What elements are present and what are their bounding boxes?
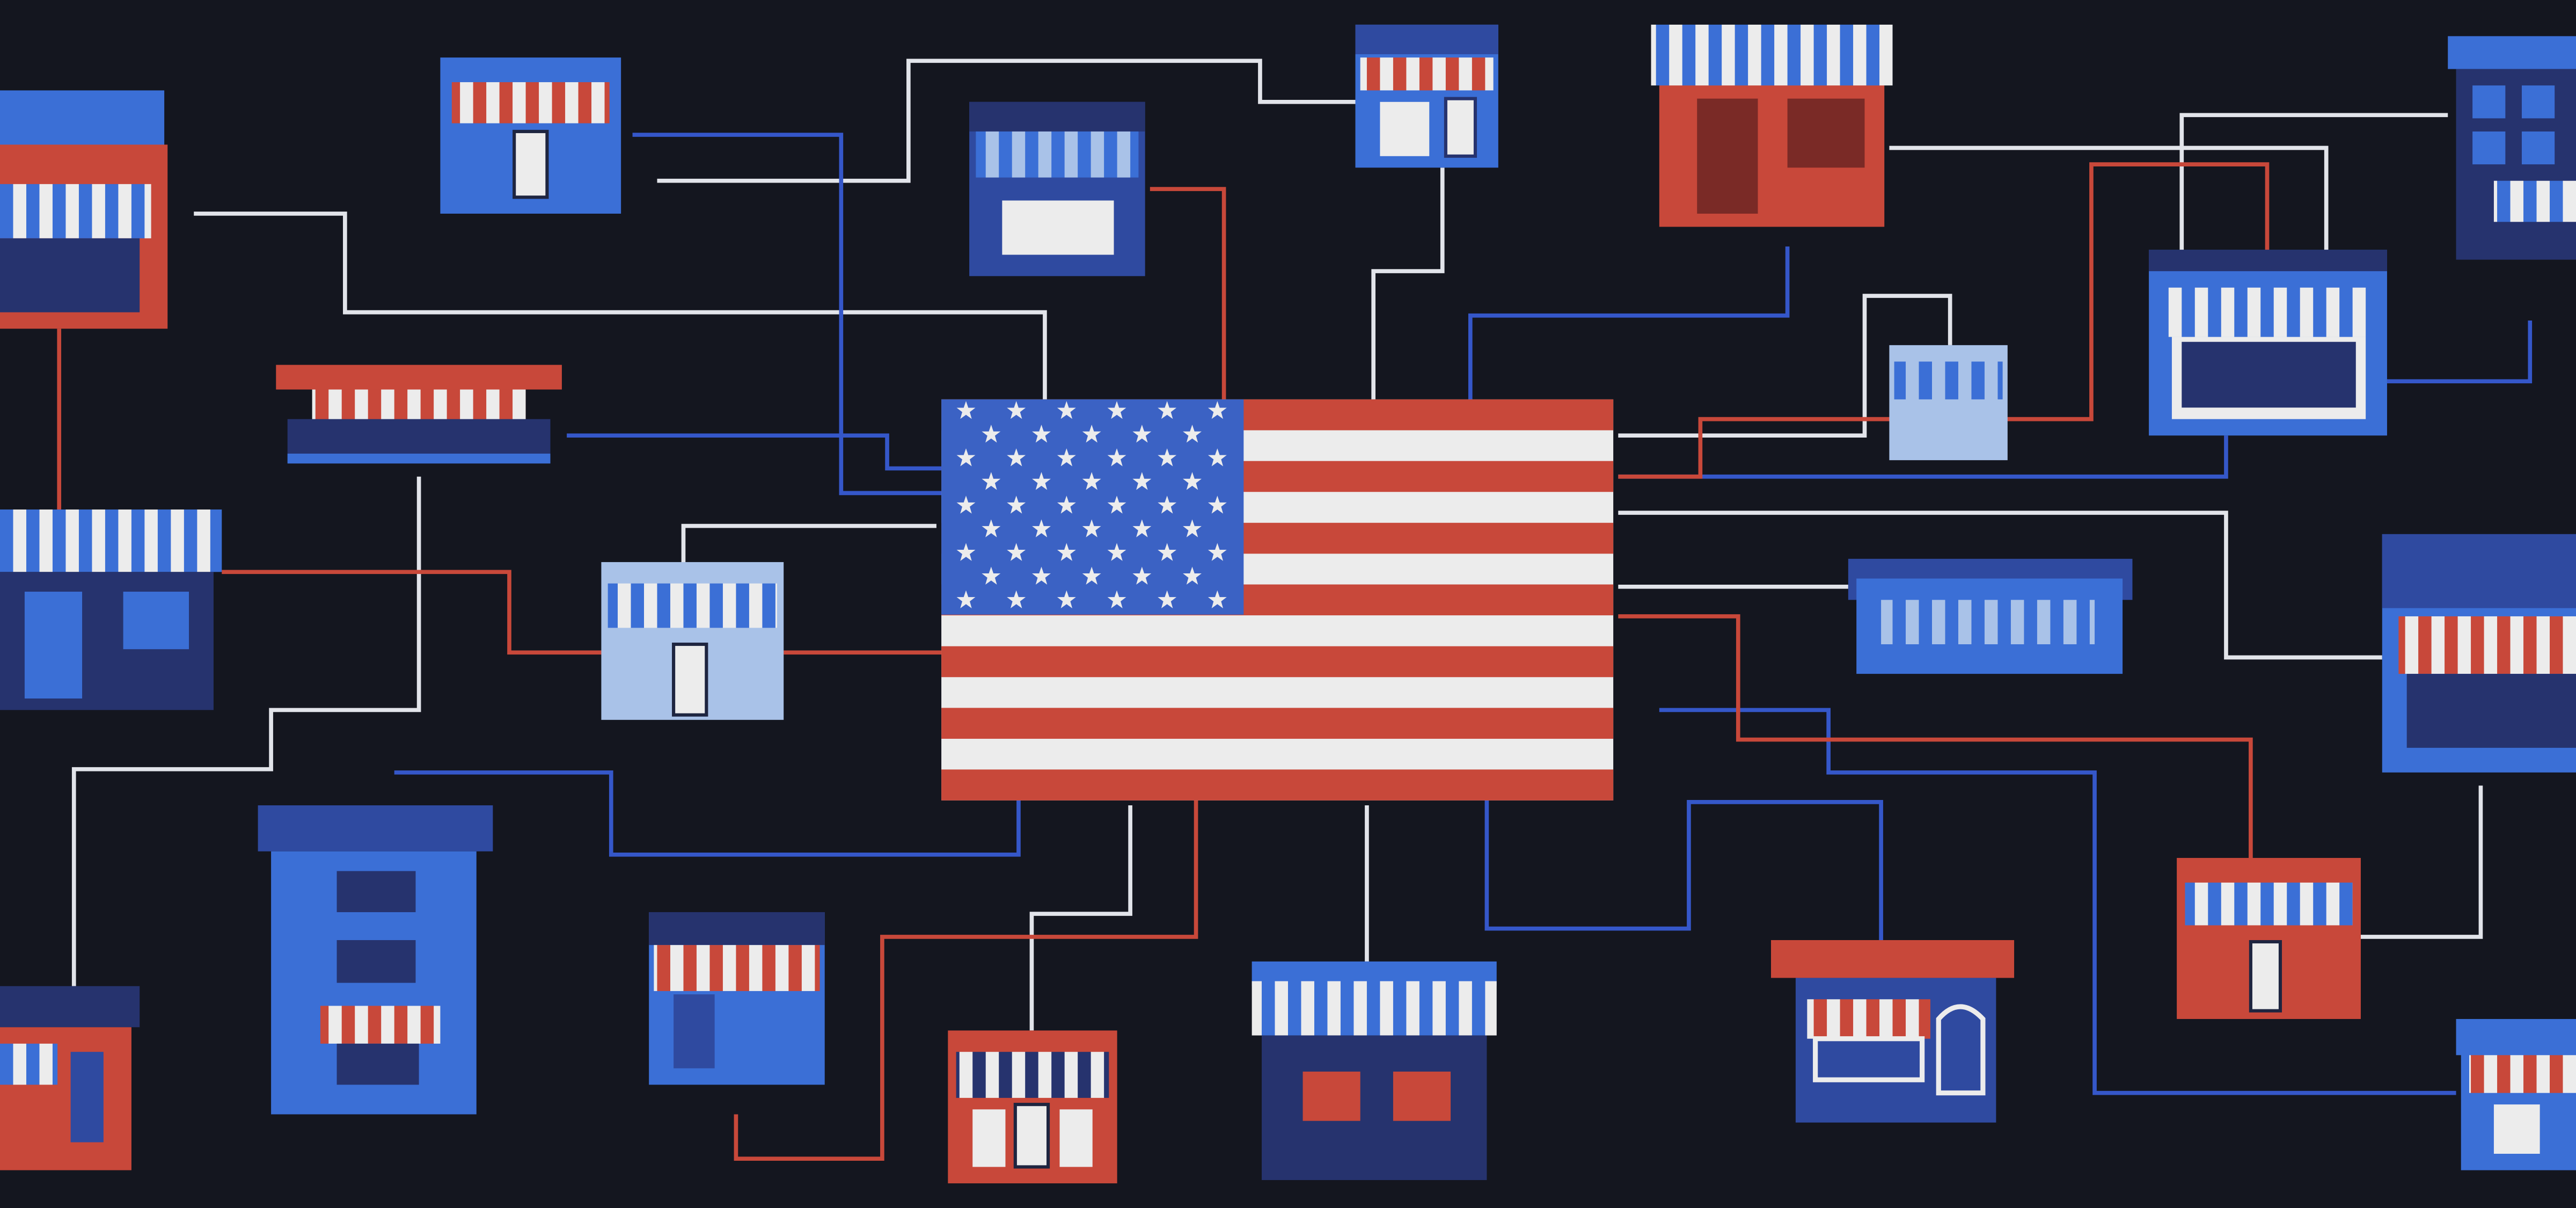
store 6 bbox=[2448, 36, 2576, 260]
store 14 bbox=[258, 805, 493, 1115]
store 3 bbox=[969, 102, 1145, 276]
store 7 bbox=[2149, 250, 2387, 435]
flag canton with stars bbox=[941, 399, 1243, 615]
store 16 bbox=[948, 1030, 1117, 1183]
store 20 bbox=[2456, 1019, 2576, 1170]
store 9 bbox=[276, 365, 562, 463]
store 13 bbox=[2382, 534, 2576, 773]
store 8 bbox=[1889, 345, 2008, 460]
store 21 bbox=[0, 986, 140, 1170]
store 2 bbox=[440, 57, 621, 214]
store 1: top-left red bbox=[0, 90, 167, 329]
store 17 bbox=[1252, 962, 1497, 1180]
store 5 bbox=[1651, 25, 1893, 227]
store 10 bbox=[0, 510, 222, 710]
store 4 bbox=[1356, 25, 1498, 168]
store 11 bbox=[601, 562, 784, 720]
flag bbox=[941, 399, 1613, 801]
store 12 bbox=[1848, 559, 2132, 674]
store 15 bbox=[649, 912, 825, 1085]
store 18 bbox=[1771, 940, 2014, 1123]
store 19 bbox=[2177, 858, 2361, 1019]
